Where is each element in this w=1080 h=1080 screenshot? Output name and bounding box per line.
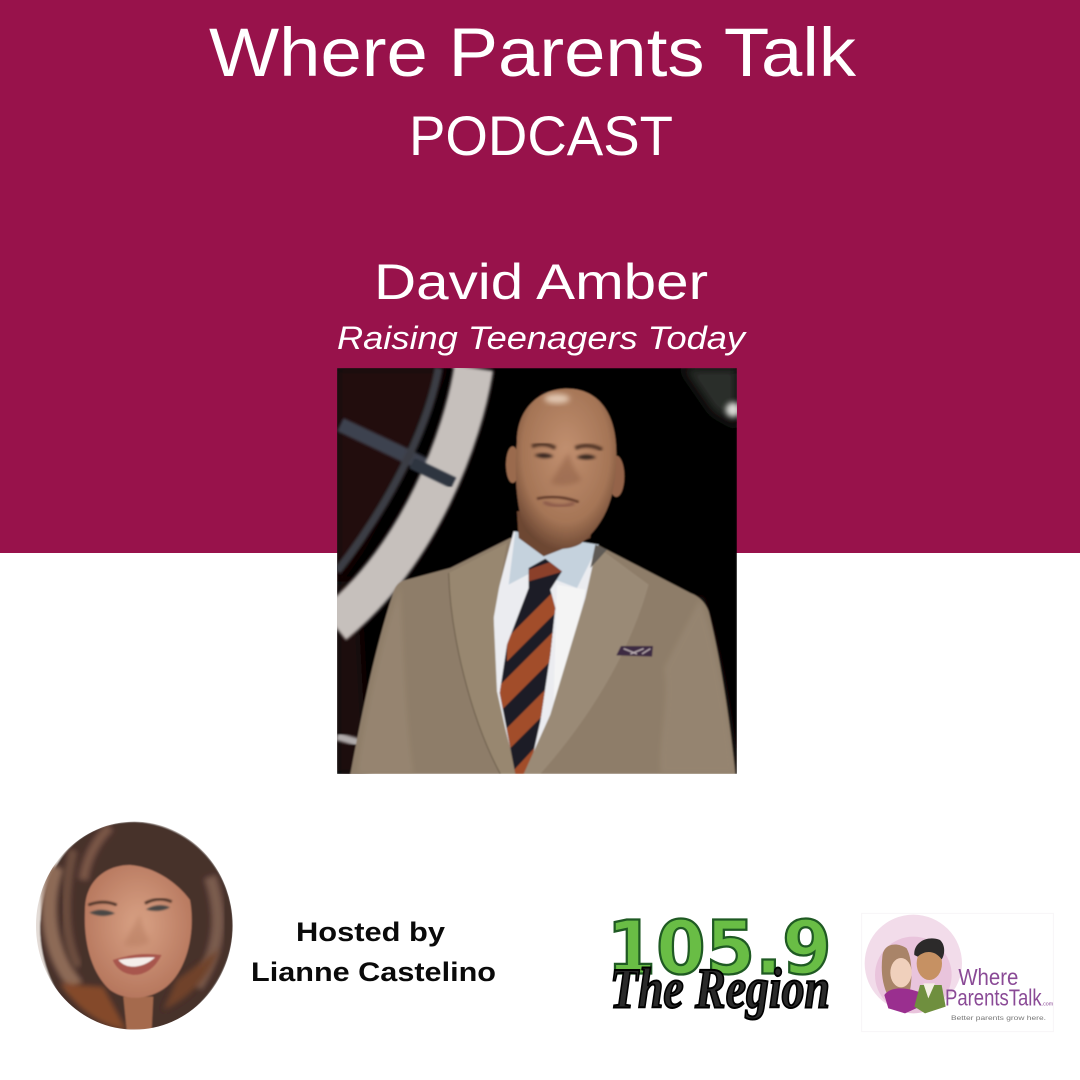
title: Where Parents Talk: Where Parents Talk: [209, 14, 857, 91]
jacket: [350, 538, 735, 774]
woman figure: [882, 945, 920, 1013]
host portrait: [36, 822, 233, 1030]
guest name: David Amber: [374, 254, 708, 310]
logo: Where Parents Talk: .com: [1042, 1001, 1054, 1007]
logo: Where Parents Talk: ParentsTalk: [945, 984, 1042, 1010]
shirt: [492, 530, 594, 752]
tie: [498, 558, 562, 774]
background: maroon header band: [0, 0, 1080, 553]
logo: 105.9 The Region: The Region: [610, 957, 830, 1020]
logo: Where Parents Talk: Better parents grow here.: [951, 1015, 1046, 1022]
host credit: [251, 917, 496, 987]
lapels: [449, 543, 515, 774]
host credit: Lianne Castelino: [251, 957, 496, 987]
subtitle: PODCAST: PODCAST: [409, 104, 673, 167]
logo: Where Parents Talk: [862, 913, 1054, 1032]
logo: Where Parents Talk: Where: [958, 964, 1018, 990]
brows, eyes, nose, mouth: [532, 444, 602, 450]
neck: [516, 510, 592, 557]
host credit: Hosted by: [296, 917, 445, 947]
head: [506, 446, 519, 483]
episode topic: Raising Teenagers Today: [337, 320, 747, 356]
man figure: [914, 938, 946, 1013]
logo: 105.9 The Region: 105.9: [607, 905, 832, 991]
pocket square: [616, 646, 653, 657]
guest portrait: [334, 368, 740, 775]
